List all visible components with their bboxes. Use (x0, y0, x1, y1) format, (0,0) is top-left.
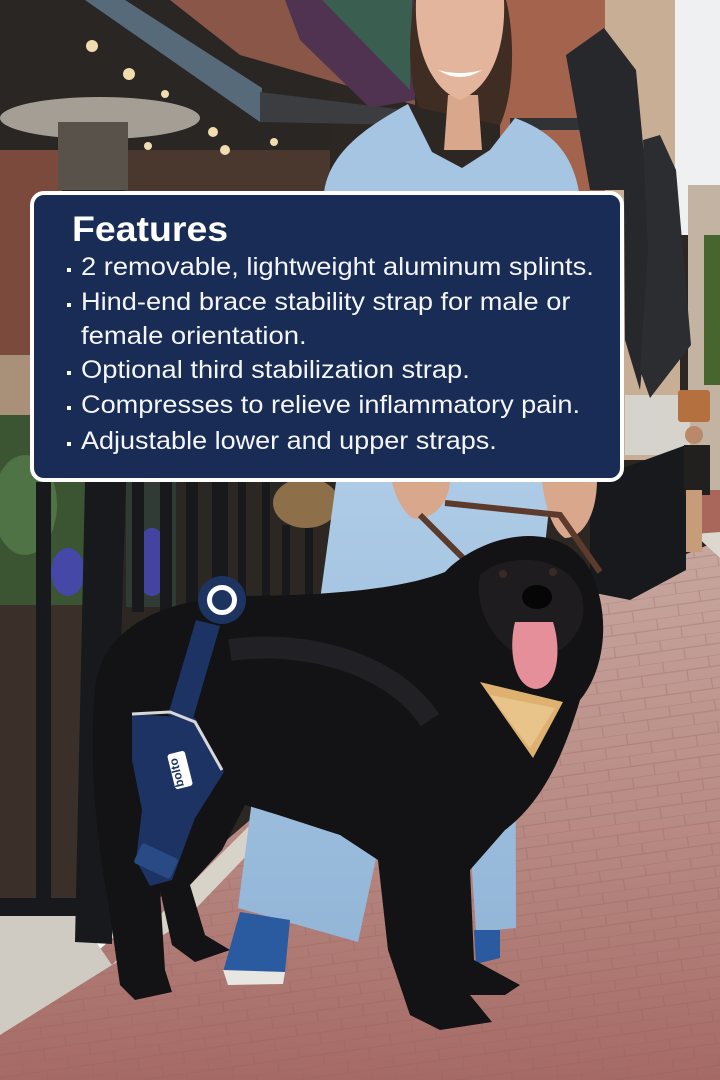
panel: features: Adjustable lower and upper straps. (81, 427, 497, 455)
basket (273, 478, 339, 528)
panel: features: 2 removable, lightweight aluminum splints. (81, 253, 594, 281)
distant pedestrian (684, 426, 710, 552)
woman (223, 0, 600, 985)
brace: bolto (166, 757, 187, 789)
panel: features: Compresses to relieve inflammatory pain. (81, 391, 580, 419)
panel: features: Hind-end brace stability strap for male or (81, 288, 570, 316)
panel: features: female orientation. (81, 322, 307, 350)
sidewalk (0, 490, 720, 1080)
heading: Features (72, 210, 228, 249)
brace (132, 620, 224, 886)
dog (93, 536, 603, 1030)
panel: features (30, 191, 624, 482)
planter and flowers (0, 415, 176, 900)
bandana (480, 682, 563, 758)
feature list (67, 253, 594, 455)
panel: features: Optional third stabilization strap. (81, 356, 470, 384)
fence (0, 445, 686, 944)
string lights (86, 40, 278, 155)
hotspot marker (198, 576, 246, 624)
